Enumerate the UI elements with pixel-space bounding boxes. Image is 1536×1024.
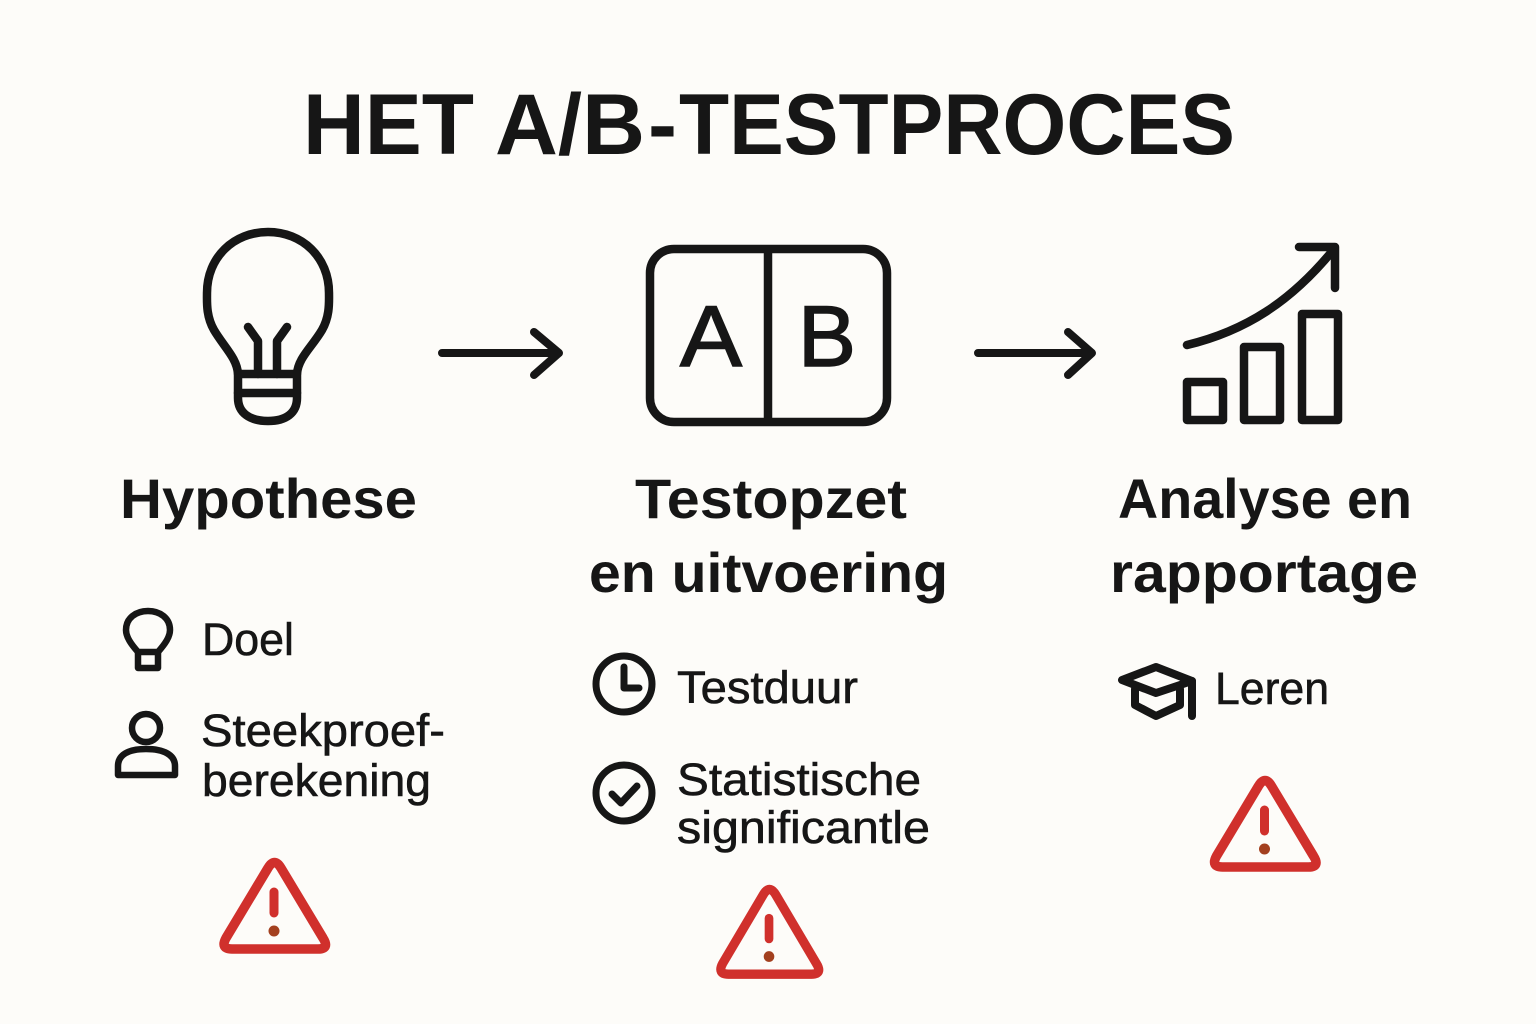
heading: Analyse en rapportage xyxy=(1110,467,1418,604)
heading: Hypothese: Hypothese xyxy=(120,467,417,530)
heading: Testopzet en uitvoering: en uitvoering xyxy=(589,541,948,604)
label: Steekproefberekening xyxy=(201,705,445,806)
icon: clock xyxy=(596,656,652,712)
icon: warning 3 xyxy=(1214,780,1316,867)
icon: graduation cap xyxy=(1122,667,1192,716)
title: - xyxy=(648,77,677,173)
icon: goal bulb xyxy=(126,611,170,668)
label: Statistische significantie: significantle xyxy=(677,802,930,853)
arrow: hypothesis to test setup xyxy=(442,332,559,375)
label: Steekproefberekening: Steekproef- xyxy=(201,705,445,756)
heading: Analyse en rapportage: Analyse en xyxy=(1118,467,1412,530)
icon: person xyxy=(118,714,175,775)
arrow: test setup to analysis xyxy=(978,332,1092,375)
label: Doel: Doel xyxy=(202,614,294,665)
label: Statistische significantie xyxy=(677,754,930,853)
label: Steekproefberekening: berekening xyxy=(202,755,431,806)
icon: rising bar chart xyxy=(1187,247,1338,420)
title: A/B xyxy=(495,77,645,173)
icon: warning 1 xyxy=(224,862,326,949)
label: Statistische significantie: Statistische xyxy=(677,754,921,805)
label: Leren: Leren xyxy=(1215,663,1329,714)
icon: A/B split panel: A xyxy=(680,289,743,385)
label: Testduur: Testduur xyxy=(677,662,858,713)
icon: light bulb xyxy=(207,232,329,421)
title: HET xyxy=(303,77,474,173)
title: TESTPROCES xyxy=(679,77,1235,173)
icon: check circle xyxy=(596,765,652,821)
heading: Testopzet en uitvoering xyxy=(589,467,948,604)
icon: A/B split panel: B xyxy=(798,289,856,385)
title xyxy=(303,77,1235,173)
icon: A/B split panel xyxy=(650,249,887,422)
heading: Testopzet en uitvoering: Testopzet xyxy=(635,467,907,530)
icon: warning 2 xyxy=(721,889,819,974)
heading: Analyse en rapportage: rapportage xyxy=(1110,541,1418,604)
